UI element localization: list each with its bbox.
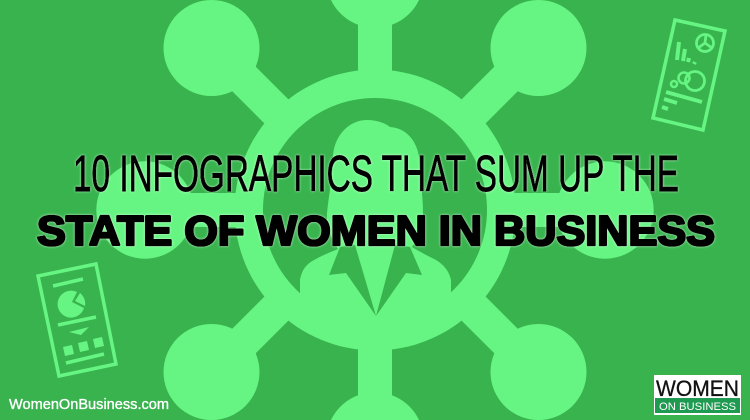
spokes xyxy=(145,0,605,420)
title line 2: STATE OF WOMEN IN BUSINESS xyxy=(37,207,715,254)
businesswoman silhouette xyxy=(300,120,451,322)
document icon: bottom left xyxy=(38,264,116,376)
network hub icon xyxy=(96,0,654,420)
logo word: on business: ON BUSINESS xyxy=(659,401,736,413)
document icon: top right xyxy=(653,20,725,130)
logo xyxy=(654,375,741,415)
hub ring xyxy=(234,70,516,350)
logo word: women: WOMEN xyxy=(656,376,739,401)
satellite circles xyxy=(96,0,654,420)
website url: WomenOnBusiness.com xyxy=(9,397,169,413)
